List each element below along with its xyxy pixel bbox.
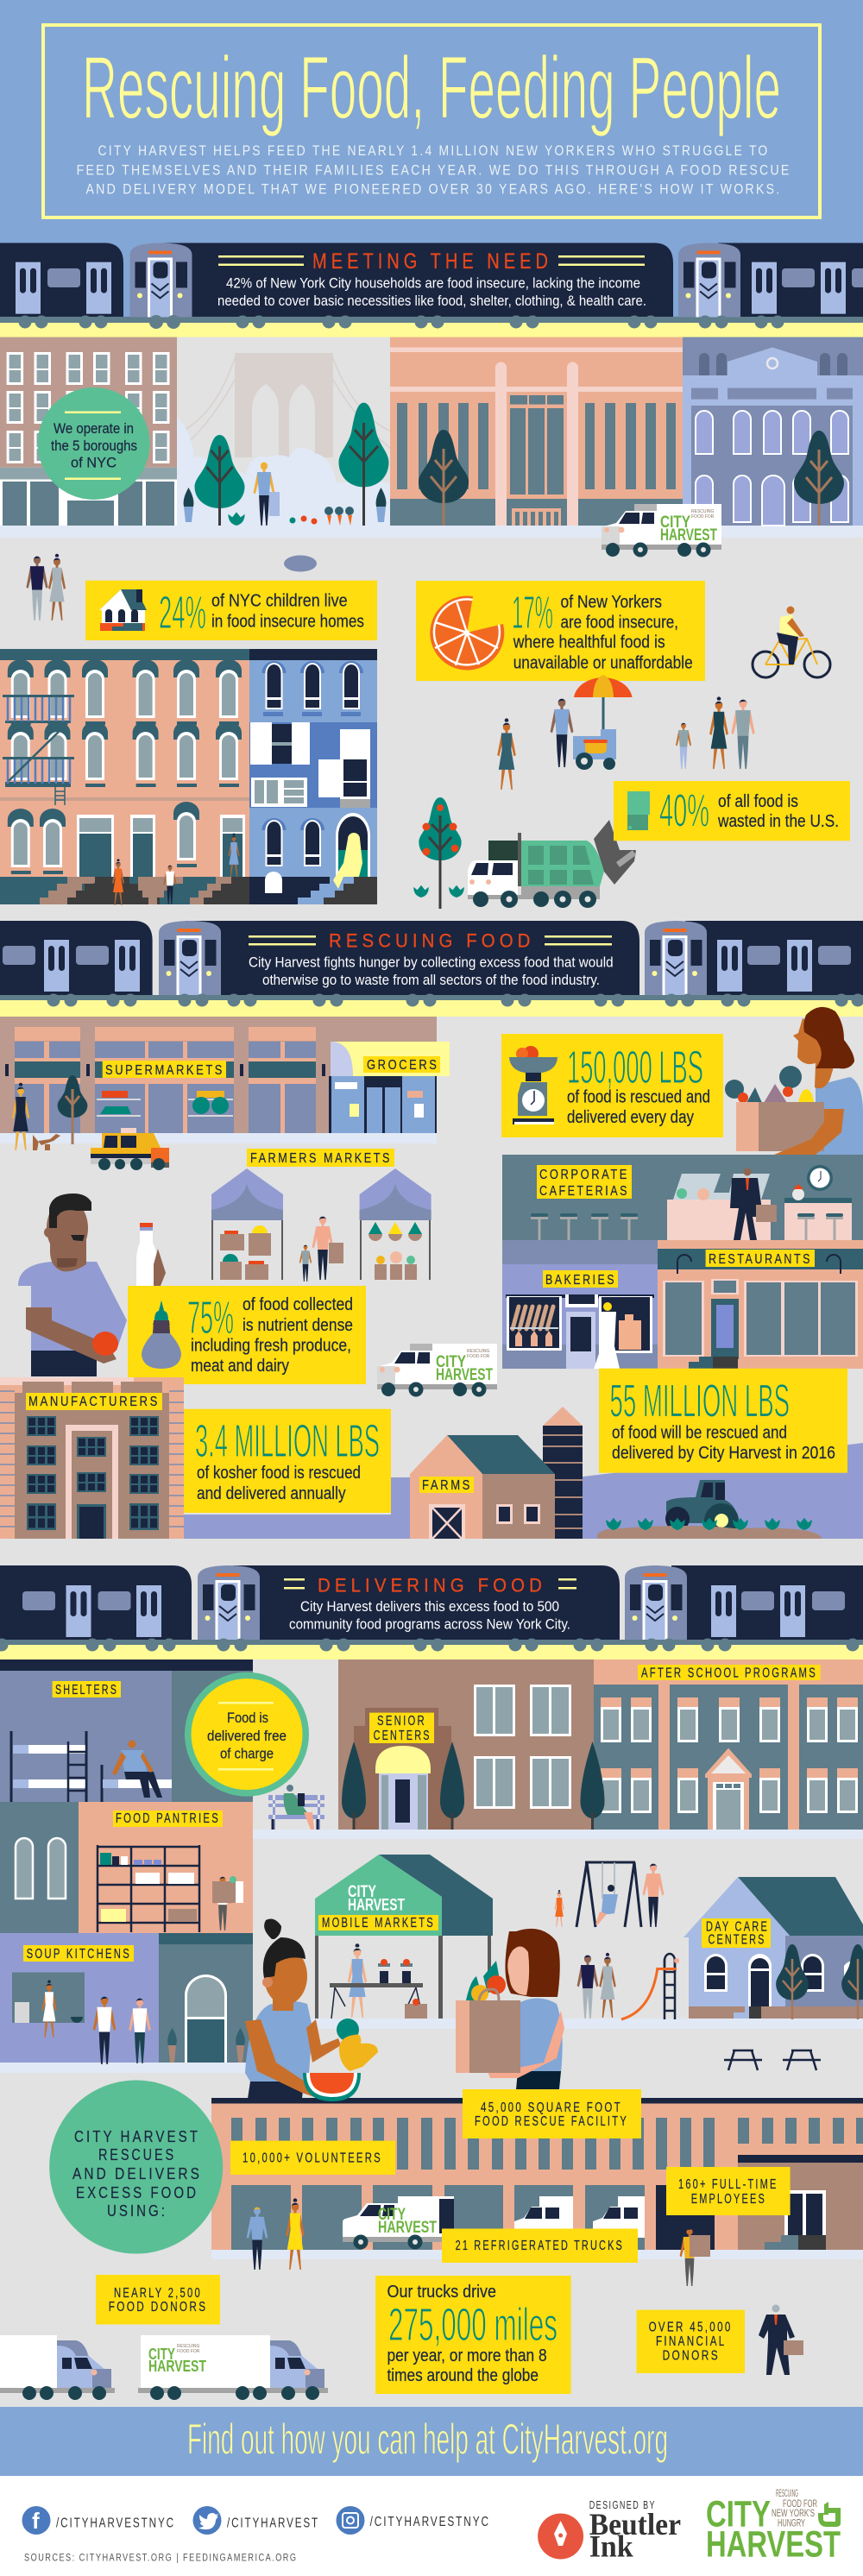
- label: 10,000 volunteers: [230, 2141, 395, 2175]
- panel: manufacturers: [0, 1377, 184, 1539]
- stat box: 55 million lbs: [599, 1369, 847, 1473]
- stat box: 40%: [614, 781, 850, 841]
- text: meeting the need: 42% of New York City households are food insecure, lacking the income: [226, 275, 640, 291]
- stools: [531, 1213, 638, 1246]
- logo: city harvest: CITY: [706, 2494, 771, 2535]
- panel: supermarkets: [0, 1017, 450, 1150]
- stat box: 17%: are food insecure,: [561, 613, 678, 632]
- market seller and table: [330, 1943, 427, 2019]
- bench with reader: [268, 1785, 324, 1830]
- social: twitter: [193, 2506, 319, 2535]
- van: city harvest: FOOD FOR: [691, 514, 715, 520]
- designer credit: beutler ink: DESIGNED BY: [589, 2499, 656, 2511]
- panel: restaurants: [658, 1240, 863, 1369]
- label: 160 employees: 160+ FULL-TIME: [678, 2177, 778, 2192]
- designer credit: beutler ink: Beutler: [589, 2507, 681, 2541]
- stat box: 40%: 40%: [659, 784, 709, 836]
- text: rescuing food: City Harvest fights hunger by collecting excess food that would: [249, 955, 614, 971]
- stat box: 3.4 million lbs: [184, 1409, 391, 1513]
- man holding milk and tomato: [18, 1194, 166, 1376]
- label: soup kitchens: [23, 1945, 134, 1962]
- seated man: [112, 1740, 162, 1798]
- shoppers: [299, 1217, 343, 1282]
- manufacturer windows: [27, 1416, 159, 1539]
- panel: delivering food train: [0, 1565, 863, 1660]
- taxi: [91, 1128, 169, 1170]
- groceries: [725, 1066, 814, 1103]
- label: senior centers: CENTERS: [374, 1729, 432, 1743]
- heading: rescuing food: RESCUING FOOD: [329, 930, 535, 952]
- truck: city harvest: [138, 2335, 328, 2400]
- truck: city harvest: HARVEST: [148, 2357, 207, 2375]
- text: delivering food: City Harvest delivers this excess food to 500: [300, 1599, 559, 1615]
- label: farmers markets: [247, 1149, 394, 1167]
- stat box: 17%: of New Yorkers: [561, 593, 662, 612]
- stat box: 75%: is nutrient dense: [243, 1316, 353, 1335]
- logo: city harvest: RESCUING: [776, 2489, 798, 2499]
- panel: farm: [410, 1407, 583, 1539]
- callout: food delivered free: delivered free: [207, 1728, 287, 1744]
- facility upper windows: [231, 2118, 863, 2170]
- panel: day care center: [683, 1877, 863, 2019]
- label: supermarkets: SUPERMARKETS: [105, 1063, 224, 1078]
- stat box: 3.4 million lbs: of kosher food is rescued: [197, 1464, 361, 1483]
- brownstone building: [0, 337, 177, 526]
- school entrance: [705, 1748, 752, 1830]
- label: restaurants: [706, 1250, 815, 1267]
- stat box: 24%: in food insecure homes: [211, 613, 364, 632]
- designer credit: beutler ink: Ink: [589, 2529, 633, 2564]
- panel: mobile market tent: CITY: [348, 1883, 376, 1901]
- social: facebook: /CITYHARVESTNYC: [56, 2516, 175, 2530]
- woman with watermelon: [245, 1919, 378, 2101]
- person carrying groceries: [212, 1876, 243, 1930]
- label: mobile markets: MOBILE MARKETS: [322, 1916, 435, 1930]
- swing set and people: [554, 1862, 664, 1927]
- vans in bays, partial: [514, 2196, 645, 2238]
- day care windows and door: [704, 1954, 863, 2006]
- callout: rescues and delivers using: USING:: [107, 2202, 167, 2220]
- panel: bakeries: [502, 1240, 658, 1369]
- woman walking: [497, 718, 516, 790]
- label: 160 employees: [666, 2167, 791, 2215]
- icon: fruit and leaf: [337, 2019, 378, 2071]
- front doors: [77, 815, 245, 877]
- callout: 5 boroughs: [38, 387, 150, 500]
- label: day care centers: [702, 1918, 771, 1948]
- woman walking dog: [12, 1083, 60, 1150]
- panel: header: [0, 0, 863, 323]
- label: bakeries: [543, 1270, 618, 1288]
- label: 10,000 volunteers: 10,000+ VOLUNTEERS: [243, 2151, 382, 2166]
- van: city harvest middle: FOOD FOR: [467, 1354, 490, 1359]
- sidewalk: [253, 1830, 863, 1839]
- cook with pot: [15, 1981, 83, 2037]
- couple near slide: [577, 1953, 616, 2019]
- lanterns: [5, 1064, 325, 1076]
- label: food pantries: FOOD PANTRIES: [116, 1811, 220, 1826]
- panel: senior center: [338, 1660, 594, 1830]
- callout: food delivered free: of charge: [220, 1745, 274, 1762]
- cypress trees: [342, 1741, 464, 1830]
- social: instagram: /CITYHARVESTNYC: [370, 2515, 490, 2529]
- label: 45,000 square foot: FOOD RESCUE FACILITY: [475, 2114, 628, 2129]
- panel: rescuing food train: [0, 921, 863, 1017]
- truck: left: [0, 2335, 115, 2400]
- couple: [26, 554, 66, 620]
- label: restaurants: RESTAURANTS: [709, 1252, 812, 1267]
- pantry shelves: [97, 1845, 200, 1932]
- entrance awning: [375, 1746, 431, 1830]
- truck: city harvest: RESCUING: [177, 2344, 200, 2349]
- stat box: 3.4 million lbs: 3.4 MILLION LBS: [195, 1415, 380, 1467]
- label: corporate cafeterias: CAFETERIAS: [539, 1184, 629, 1199]
- label: corporate cafeterias: [537, 1165, 632, 1199]
- apple tree: [413, 797, 464, 909]
- panel: city harvest facility: [211, 2098, 863, 2259]
- sources: SOURCES: CITYHARVEST.ORG | FEEDINGAMERICA.ORG: [24, 2554, 297, 2564]
- trees: [195, 403, 388, 526]
- woman with grocery bag: [725, 1007, 863, 1155]
- label: shelters: [53, 1681, 121, 1697]
- stat box: 75%: [128, 1286, 366, 1384]
- callout: food delivered free: [185, 1672, 309, 1797]
- text: rescuing food: [249, 955, 614, 988]
- panel: footer: [0, 2476, 863, 2576]
- stat box: 17%: unavailable or unaffordable: [513, 653, 693, 672]
- van: city harvest: HARVEST: [660, 526, 717, 545]
- label: 160 employees: EMPLOYEES: [691, 2192, 766, 2207]
- stat box: 24%: 24%: [159, 587, 206, 639]
- truck: city harvest: CITY: [148, 2345, 175, 2363]
- label: day care centers: DAY CARE: [706, 1920, 769, 1935]
- label: mobile markets: [318, 1915, 438, 1930]
- food display case: [673, 1174, 770, 1200]
- van: city harvest middle: CITY: [436, 1353, 466, 1371]
- stat box: 17%: [416, 581, 705, 681]
- label: 2,500 food donors: [96, 2275, 220, 2325]
- van: city harvest middle: [377, 1344, 497, 1396]
- text: meeting the need: [217, 275, 646, 309]
- heading: meeting the need: MEETING THE NEED: [312, 249, 552, 274]
- icon: eggplant: [142, 1301, 181, 1369]
- label: corporate cafeterias: CORPORATE: [539, 1168, 629, 1182]
- social: facebook: f: [32, 2508, 40, 2534]
- label: soup kitchens: SOUP KITCHENS: [27, 1947, 131, 1962]
- label: farms: FARMS: [422, 1478, 472, 1493]
- stat box: 75%: meat and dairy: [191, 1357, 289, 1376]
- label: senior centers: [369, 1713, 434, 1743]
- groceries: [466, 1961, 506, 2002]
- produce displays: [97, 1091, 233, 1117]
- label: senior centers: SENIOR: [377, 1714, 426, 1729]
- manhole: [284, 556, 317, 571]
- stat box: 75%: of food collected: [243, 1295, 353, 1314]
- arched windows: [8, 659, 242, 874]
- stat box: 150,000 lbs: [501, 1034, 723, 1137]
- garbage truck: [468, 820, 636, 908]
- label: 2,500 food donors: FOOD DONORS: [109, 2300, 207, 2315]
- label: 45,000 financial donors: [637, 2310, 745, 2373]
- panel: after school programs: [580, 1660, 863, 1830]
- stat box: 40%: wasted in the U.S.: [717, 812, 839, 831]
- callout: rescues and delivers using: AND DELIVERS: [72, 2165, 202, 2182]
- callout: rescues and delivers using: CITY HARVEST: [74, 2128, 200, 2145]
- blue hall building: [683, 337, 863, 526]
- text: delivering food: community food programs across New York City.: [289, 1617, 570, 1633]
- stoops: [0, 872, 377, 904]
- social: facebook: [22, 2506, 175, 2535]
- label: grocers: GROCERS: [367, 1058, 438, 1073]
- stat box: 3.4 million lbs: and delivered annually: [197, 1484, 346, 1503]
- blue facade windows: [262, 661, 370, 877]
- ground: farm field: [184, 1443, 863, 1539]
- stat box: 275,000 miles: per year, or more than 8: [387, 2346, 547, 2365]
- label: bakeries: BAKERIES: [545, 1273, 616, 1288]
- designer credit: beutler ink: [538, 2499, 681, 2564]
- people on stoops: [112, 833, 362, 905]
- van: city harvest middle: HARVEST: [436, 1366, 493, 1384]
- stat box: 24%: [85, 581, 377, 640]
- panel: food pantries: [0, 1802, 253, 1933]
- van in bay: [343, 2196, 454, 2249]
- facility loading bays: [231, 2185, 645, 2250]
- market produce: [220, 1222, 422, 1280]
- panel: mobile market tent: [315, 1855, 493, 2019]
- stat box: 275,000 miles: [375, 2276, 571, 2394]
- panel: soup kitchens: [0, 1933, 253, 2073]
- callout: food delivered free: Food is: [227, 1710, 268, 1726]
- label: 45,000 square foot: [463, 2089, 641, 2138]
- stat box: 24%: of NYC children live: [211, 592, 348, 611]
- stat box: 17%: 17%: [512, 587, 553, 639]
- van: city harvest: RESCUING: [691, 509, 715, 514]
- slide and ladder: [621, 1954, 679, 2019]
- heading: delivering food: DELIVERING FOOD: [318, 1575, 546, 1597]
- tree: [58, 1075, 87, 1144]
- picnic tables: [724, 2050, 821, 2070]
- woman with grocery bag lower: [456, 1929, 564, 2089]
- panel: mobile market tent: HARVEST: [348, 1897, 405, 1914]
- label: 21 trucks: 21 REFRIGERATED TRUCKS: [456, 2239, 624, 2253]
- panel: meeting the need train: [0, 243, 863, 337]
- callout: 5 boroughs: of NYC: [71, 455, 117, 471]
- logo: city harvest: [706, 2489, 841, 2566]
- callout: rescues and delivers using: [49, 2080, 223, 2254]
- icon: house: [99, 589, 147, 631]
- cutaway kitchen cabinets: [250, 722, 370, 808]
- stat box: 150,000 lbs: delivered every day: [567, 1108, 694, 1127]
- icon: tomato: [92, 1332, 118, 1356]
- label: day care centers: CENTERS: [708, 1933, 766, 1948]
- van: city harvest middle: RESCUING: [467, 1349, 490, 1354]
- logo: city harvest: FOOD FOR: [783, 2499, 817, 2510]
- text: meeting the need: needed to cover basic necessities like food, shelter, clothing, & health care.: [217, 293, 646, 309]
- grocer store: [329, 1042, 450, 1133]
- stat box: 17%: where healthful food is: [513, 633, 665, 652]
- businessman: [730, 1168, 777, 1240]
- callout: 5 boroughs: We operate in: [54, 420, 134, 437]
- label: 21 trucks: [442, 2228, 638, 2263]
- people waving at facility: [247, 2198, 305, 2270]
- stat box: 75%: including fresh produce,: [191, 1337, 351, 1356]
- stat box: 150,000 lbs: 150,000 LBS: [567, 1042, 703, 1093]
- fire escape: [3, 695, 74, 805]
- logo: city harvest: NEW YORK'S: [772, 2509, 815, 2519]
- label: food pantries: [113, 1811, 223, 1827]
- stat box: 275,000 miles: times around the globe: [387, 2366, 539, 2385]
- callout: rescues and delivers using: RESCUES: [98, 2146, 176, 2163]
- panel: farmers markets: [211, 1149, 432, 1282]
- text: delivering food: [289, 1599, 570, 1633]
- label: 45,000 financial donors: OVER 45,000: [649, 2321, 733, 2335]
- icon: orange slice: [430, 595, 504, 670]
- person with box: [680, 2228, 710, 2286]
- family: [676, 696, 755, 769]
- label: 45,000 square foot: 45,000 SQUARE FOOT: [481, 2100, 622, 2115]
- stat box: 275,000 miles: 275,000 miles: [388, 2299, 557, 2351]
- soup kitchen guests: [93, 1997, 151, 2064]
- panel: shelters: [0, 1660, 253, 1802]
- stat box: 75%: 75%: [187, 1292, 234, 1344]
- label: 45,000 financial donors: DONORS: [663, 2349, 720, 2364]
- bunk beds: [11, 1731, 172, 1802]
- social: twitter: /CITYHARVEST: [227, 2516, 319, 2530]
- stat box: 275,000 miles: Our trucks drive: [387, 2283, 496, 2302]
- logo: city harvest: HUNGRY: [778, 2519, 805, 2529]
- call to action band: [0, 2407, 863, 2476]
- van: city harvest: CITY: [660, 513, 690, 532]
- callout: 5 boroughs: the 5 boroughs: [51, 438, 137, 454]
- arched door: [167, 1975, 245, 2063]
- panel: corporate cafeterias: [502, 1155, 863, 1246]
- label: shelters: SHELTERS: [55, 1683, 118, 1697]
- panel: city street buildings: [0, 337, 863, 557]
- peach post office building: [390, 337, 683, 526]
- businessman with briefcase: [759, 2304, 803, 2375]
- icon: milk bottle: [136, 1223, 166, 1286]
- stat box: 40%: of all food is: [718, 792, 798, 811]
- facility annex: [738, 2155, 863, 2250]
- school windows: [601, 1697, 858, 1813]
- icon: watermelon: [303, 2073, 361, 2101]
- cyclist: [753, 606, 830, 677]
- label: manufacturers: MANUFACTURERS: [28, 1395, 160, 1409]
- food cart vendor: [551, 675, 632, 770]
- icon: trash bin: [627, 791, 650, 830]
- text: rescuing food: otherwise go to waste from all sectors of the food industry.: [262, 973, 600, 988]
- label: farmers markets: FARMERS MARKETS: [250, 1151, 392, 1166]
- callout: rescues and delivers using: EXCESS FOOD: [76, 2184, 198, 2201]
- stat box: 55 million lbs: delivered by City Harvest in 2016: [612, 1444, 835, 1463]
- icon: scale with fruit: [509, 1046, 557, 1124]
- small plants and pots: [184, 488, 386, 526]
- label: 45,000 financial donors: FINANCIAL: [656, 2334, 727, 2349]
- social: instagram: [337, 2506, 490, 2535]
- stat box: 150,000 lbs: of food is rescued and: [567, 1088, 710, 1107]
- van in bay: CITY: [378, 2206, 406, 2224]
- person with shopping bag: [254, 463, 280, 526]
- row houses: [0, 649, 377, 905]
- day care trees: [776, 1944, 863, 2019]
- label: 2,500 food donors: NEARLY 2,500: [114, 2286, 202, 2301]
- tractor and crop field: [597, 1480, 822, 1539]
- sidewalk lower: [253, 2019, 863, 2029]
- intro text: [77, 143, 791, 198]
- van: city harvest: [602, 504, 721, 557]
- brooklyn bridge park: [177, 337, 391, 526]
- truck: city harvest: FOOD FOR: [177, 2349, 200, 2354]
- stat box: 55 million lbs: of food will be rescued and: [612, 1424, 787, 1443]
- van in bay: HARVEST: [378, 2219, 437, 2237]
